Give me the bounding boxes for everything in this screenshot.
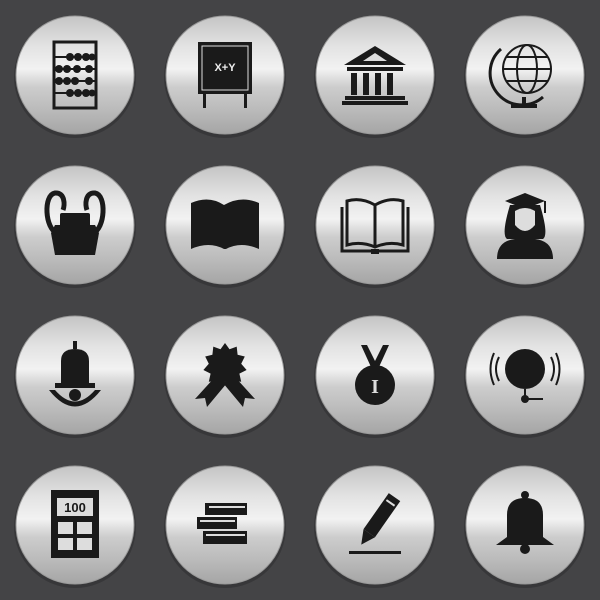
icon: alarm bell bbox=[464, 316, 586, 438]
icon: museum bbox=[314, 16, 436, 138]
icon: backpack bbox=[14, 166, 136, 288]
icon: medal bbox=[314, 316, 436, 438]
icon: globe bbox=[464, 16, 586, 138]
icon: open book outline bbox=[314, 166, 436, 288]
icon: pencil bbox=[314, 466, 436, 588]
icon: blackboard bbox=[164, 16, 286, 138]
icon: open book filled bbox=[164, 166, 286, 288]
icon: award rosette bbox=[164, 316, 286, 438]
icon: blackboard: X+Y bbox=[214, 62, 236, 74]
icon: abacus bbox=[14, 16, 136, 138]
icon: graduate woman bbox=[464, 166, 586, 288]
icon: stack of books bbox=[164, 466, 286, 588]
icon: bell bbox=[464, 466, 586, 588]
icon: school bell bbox=[14, 316, 136, 438]
icon: medal: I bbox=[371, 376, 379, 398]
icon: calculator 100 bbox=[14, 466, 136, 588]
icon: calculator 100: 100 bbox=[64, 500, 86, 515]
